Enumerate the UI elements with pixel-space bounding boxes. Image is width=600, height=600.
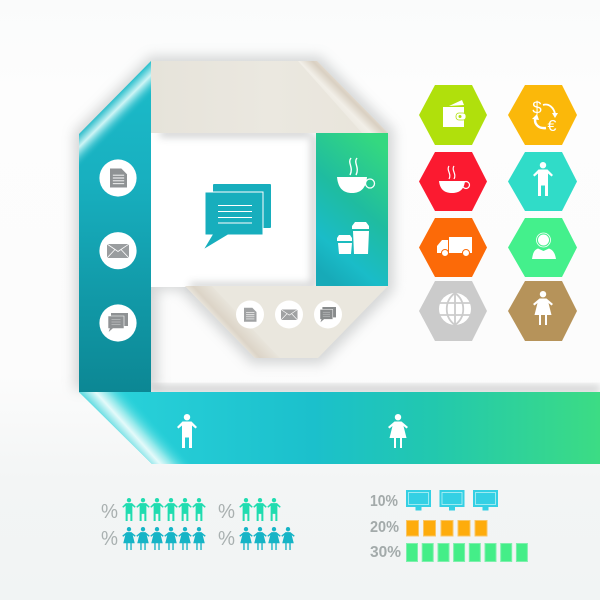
percent labels bbox=[370, 493, 401, 561]
hexagon: coffee bbox=[419, 152, 487, 211]
percent labels: % bbox=[218, 528, 235, 550]
panel: left teal ribbon bbox=[79, 61, 151, 392]
panel: central white square bbox=[151, 133, 317, 287]
panel: top cream ribbon bbox=[151, 61, 388, 133]
icon: small envelope circle bbox=[275, 300, 303, 328]
phones bbox=[406, 544, 527, 562]
hexagon: delivery truck bbox=[419, 218, 487, 277]
icon: coffee cup bbox=[337, 158, 374, 193]
panel: bottom cream fold bbox=[185, 286, 388, 358]
hexagon: globe bbox=[419, 281, 487, 341]
panel: right green ribbon bbox=[316, 133, 388, 286]
hexagon: wallet bbox=[419, 85, 487, 145]
hexagon: currency exchange: $ bbox=[532, 98, 542, 117]
inner square shadows bbox=[160, 130, 317, 289]
percent labels: % bbox=[101, 501, 118, 523]
hexagon: currency exchange: € bbox=[548, 118, 557, 135]
tablets bbox=[406, 520, 487, 536]
hexagon: currency exchange bbox=[508, 85, 577, 145]
percent labels: 30% bbox=[370, 544, 401, 561]
icon: document circle bbox=[99, 159, 137, 197]
icon: chat circle bbox=[99, 304, 137, 342]
row: men bbox=[122, 498, 281, 521]
icon: man bbox=[177, 414, 197, 448]
percent labels: 20% bbox=[370, 519, 399, 536]
people statistics bbox=[101, 498, 295, 550]
icon: small chat circle bbox=[314, 300, 342, 328]
row: women bbox=[122, 527, 295, 550]
icon: envelope circle bbox=[99, 232, 137, 269]
monitors bbox=[406, 490, 498, 510]
ribbon drop shadows bbox=[74, 56, 394, 390]
percent labels: 10% bbox=[370, 493, 398, 510]
hexagon: support agent bbox=[508, 218, 577, 277]
icon: takeaway cups bbox=[337, 222, 369, 254]
percent labels: % bbox=[218, 501, 235, 523]
hexagon: man bbox=[508, 152, 577, 211]
icon: woman bbox=[388, 414, 408, 448]
percent labels bbox=[101, 501, 235, 550]
panel: lower wide ribbon bbox=[79, 392, 600, 464]
icon: small document circle bbox=[236, 300, 264, 328]
shadow above lower ribbon bbox=[151, 385, 600, 393]
device statistics bbox=[370, 490, 527, 562]
hexagon: woman bbox=[508, 281, 577, 341]
percent labels: % bbox=[101, 528, 118, 550]
icon: central speech bubbles bbox=[203, 184, 271, 250]
